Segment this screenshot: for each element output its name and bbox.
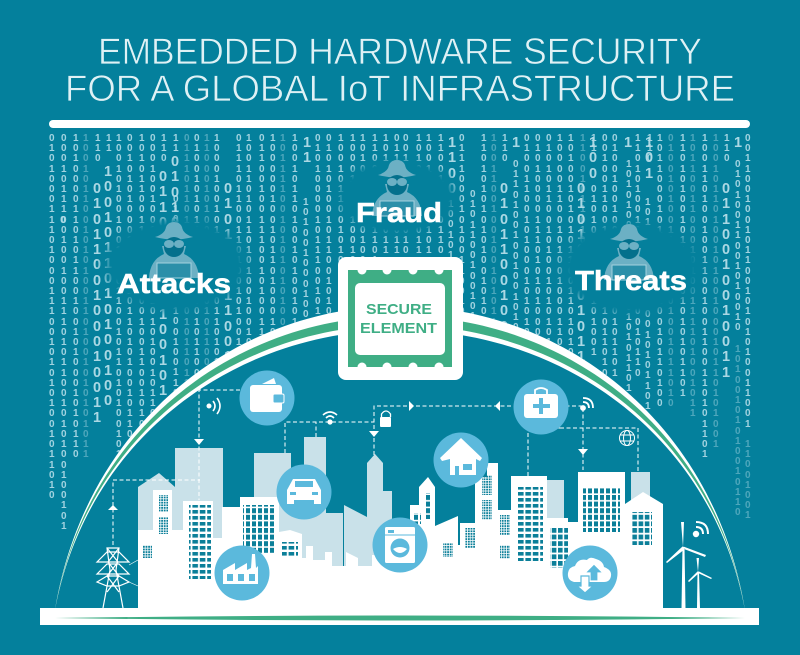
binary code background: 0110100100100101001011 — [513, 159, 519, 384]
binary code background: 010101001011001010100110 — [326, 133, 332, 379]
binary code background: 110010010110 — [438, 133, 444, 256]
binary code background: 101 — [645, 135, 653, 182]
circle icon: washing machine — [372, 518, 428, 572]
binary code background: 101001001011 — [416, 133, 422, 256]
binary code background: 10011010110101001001011010 — [246, 133, 252, 399]
binary code background: 100001100101001000110100101 — [557, 133, 563, 409]
binary code background: 101001010101100110101001011 — [568, 133, 574, 409]
icon: wifi left — [323, 412, 337, 424]
icon: globe — [620, 430, 634, 446]
binary code background: 011001101100101 — [159, 169, 167, 399]
binary code background: 010010010010110100101101 — [612, 133, 618, 379]
binary code background: 110101010101001010100101101 — [481, 133, 487, 409]
circle icon: wallet — [240, 370, 294, 426]
binary code background: 11 — [591, 133, 597, 154]
binary code background: 10011010010011001001100110101101 — [702, 133, 708, 460]
binary code background: 011101100110100101001001 — [236, 133, 242, 379]
binary code background: 011001001011 — [394, 133, 400, 256]
binary code background: 11 — [303, 135, 311, 166]
binary code background: 01001110010100100110101 — [173, 194, 179, 429]
binary code background: 001011010010 — [403, 133, 409, 256]
label: Fraud: Fraud — [356, 197, 442, 228]
arrowheads — [108, 401, 588, 510]
binary code background: 0110010011100101001100101011 — [259, 133, 265, 419]
binary code background: 110 — [502, 133, 508, 164]
binary code background: 11 — [173, 133, 179, 154]
binary code background: 1001011010010100100010110101001 — [713, 133, 719, 450]
binary code background: 001001100101101001011010 — [602, 133, 608, 379]
binary code background: 1100100101101 — [372, 133, 378, 266]
binary code background: 010010100110010101001011010 — [668, 133, 674, 409]
binary code background: 1011001100010100111101001011 — [690, 133, 696, 419]
binary code background: 11 — [106, 133, 112, 154]
hacker: attacks — [149, 222, 199, 278]
ground base — [40, 608, 759, 625]
binary code background: 10100101010010110 — [735, 344, 741, 518]
binary code background: 010101001011 — [577, 181, 585, 365]
binary code background: 101011001011 — [383, 133, 389, 256]
binary code background: 1001011010 — [448, 199, 454, 302]
icon: pylon — [97, 548, 138, 608]
binary code background: 000101110010010011101011001010100100101 — [61, 133, 67, 532]
binary code background: 1 — [624, 135, 632, 151]
secure element chip — [338, 257, 463, 380]
binary code background: 01110110101101010010110110010 — [184, 133, 190, 430]
binary code background: 01011001001010 — [470, 189, 476, 333]
front skyline — [138, 463, 663, 608]
secure element chip: ELEMENT — [360, 320, 437, 337]
binary code background: 010100001011100101010011 — [315, 133, 321, 379]
binary code background: 1 — [734, 135, 742, 151]
binary code background: 001010100010100101101010010110101 — [127, 133, 133, 470]
binary code background: 0110010010011 — [722, 181, 730, 381]
binary code background: 0101100100010 — [500, 181, 508, 381]
binary code background: 101011001100101000100110010101 — [139, 133, 145, 440]
circle icon: factory — [214, 546, 270, 600]
icon: wind turbines — [666, 522, 712, 608]
binary code background: 110101001001011010010110 — [635, 133, 641, 379]
circle icon: car — [276, 464, 332, 520]
binary code background: 100101101001010010110101001 — [292, 133, 298, 409]
binary code background: 110 — [95, 133, 101, 164]
binary code background: 00110010010110010101010011001 — [745, 133, 751, 430]
binary code background: 010100110 — [171, 154, 179, 292]
binary code background: 100101100101 — [426, 133, 432, 256]
binary code background: 01001010101001000010110010110 — [194, 133, 200, 430]
title: FOR A GLOBAL IoT INFRASTRUCTURE — [65, 68, 735, 109]
binary code background: 110 — [724, 133, 730, 164]
binary code background: 110010110100101 — [580, 133, 586, 287]
binary code background: 100101001001010110010110101001011010 — [116, 133, 122, 501]
binary code background: 11001001 — [745, 439, 751, 521]
binary code background: 1000110010010 — [350, 133, 356, 266]
title — [65, 31, 735, 109]
binary code background: 010011001010001010100101010 — [524, 133, 530, 409]
icon: wifi right — [581, 398, 593, 410]
binary code background: 100000100101101000101101001 — [270, 133, 276, 409]
binary code background: 11000101001010010101100101101 — [204, 133, 210, 430]
binary code background: 11010100101101001010101101 — [680, 133, 686, 399]
binary code background: 010100011 0101000111001010101001011010 — [49, 133, 66, 501]
secure element chip: SECURE — [366, 301, 432, 318]
binary code background: 10010110010101001101001010101011 — [83, 133, 89, 460]
binary code background: 101010010110100101011010 — [626, 159, 632, 405]
dome — [55, 306, 745, 610]
binary code background: 010100111001011 — [224, 181, 232, 411]
binary code background: 10100001101011001001010001010110 — [73, 133, 79, 460]
binary code background: 101111001010101010010100 — [280, 133, 286, 379]
binary code background: 10001001010010110110101001011 — [214, 133, 220, 430]
binary code background: 010101100101001010101001011 — [546, 133, 552, 409]
icon: signal — [207, 398, 220, 414]
building windows — [143, 475, 652, 579]
circle icon: cloud — [562, 546, 618, 600]
binary code background: 1 — [512, 135, 520, 151]
binary code background: 110 — [161, 133, 167, 164]
binary code background: 01010100101101001 — [591, 184, 597, 358]
fade masks around hackers — [96, 155, 709, 320]
hacker: threats — [604, 224, 654, 280]
title: EMBEDDED HARDWARE SECURITY — [98, 31, 702, 72]
divider bar — [49, 120, 750, 128]
circle icon: medical kit — [514, 380, 568, 434]
binary code background: 1001011001010010 — [338, 133, 344, 297]
binary code background: 1001011010100100 — [104, 164, 112, 409]
binary code background: 010100001110101010000101101 — [535, 133, 541, 409]
hacker: fraud — [372, 160, 422, 216]
label: Threats: Threats — [575, 265, 687, 296]
binary code background: 101100010100101010010110100 — [657, 133, 663, 409]
binary code background: 1100 — [448, 135, 456, 197]
binary code background: 110 — [647, 133, 653, 164]
icon: wifi turbine — [694, 522, 708, 536]
circle icon: house — [434, 432, 488, 488]
binary code background: 100110010010010101110010110 — [491, 133, 497, 409]
dashed connection lines — [113, 390, 638, 545]
label: Attacks: Attacks — [117, 268, 231, 299]
binary code background: 1010010110100 — [360, 133, 366, 266]
binary code background: 100 — [589, 135, 597, 182]
binary code background: 101001011010010101101 — [645, 197, 651, 412]
binary code background: 000100100101101010101001011001 — [150, 133, 156, 440]
icon: lock — [380, 411, 391, 427]
binary code background: 011100010100110010101010 — [459, 133, 465, 379]
binary code background: 01010011001010010 — [735, 159, 741, 333]
binary code background: 0101100100010011 — [93, 181, 101, 426]
binary code background: 101001000100100110 — [303, 197, 309, 381]
back skyline — [138, 437, 650, 580]
